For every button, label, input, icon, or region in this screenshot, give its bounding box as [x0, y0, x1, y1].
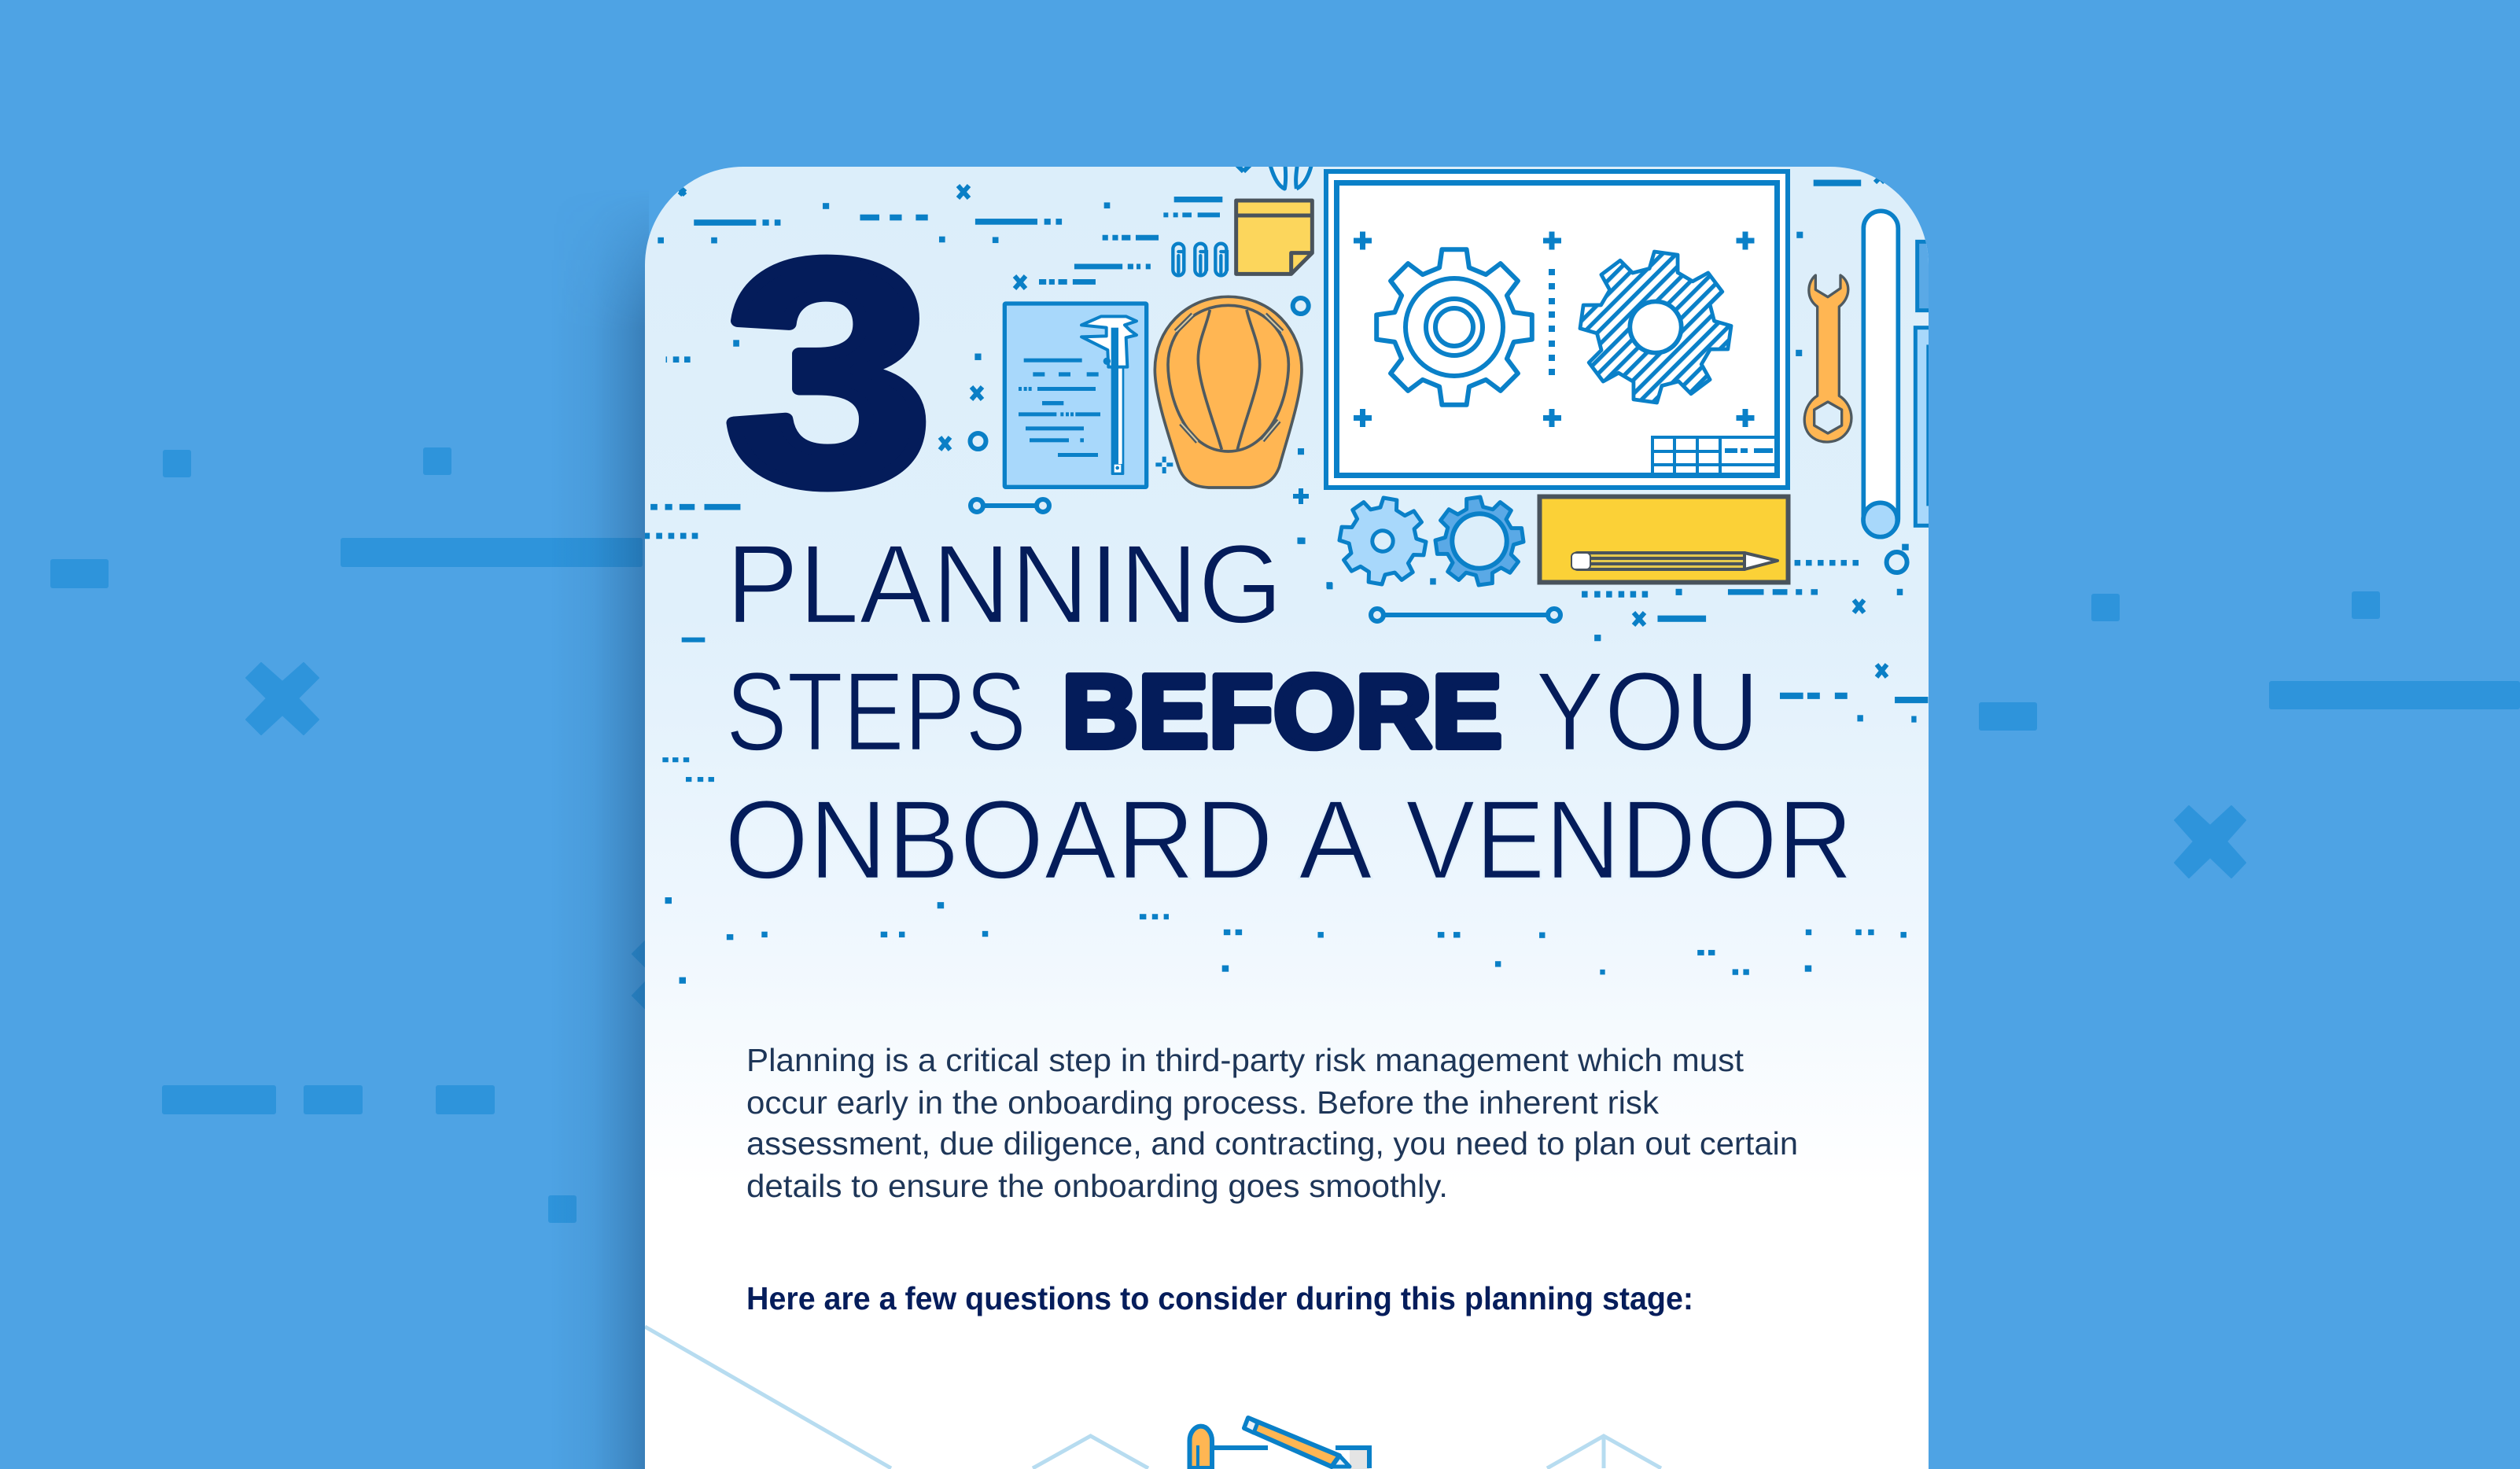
text block: intro [746, 1042, 1798, 1204]
title block table [1652, 437, 1778, 477]
icon: connector right [1371, 609, 1560, 621]
icon: sticky note and paper clips [1163, 165, 1312, 275]
title line 3: vendor: VENDOR [1406, 778, 1853, 903]
icon: document with caliper [1004, 304, 1147, 487]
pencil [1571, 553, 1778, 569]
icon: connector left [971, 499, 1049, 512]
title line 3: a: A [1299, 778, 1373, 903]
icon: mid blue gear [1433, 495, 1526, 587]
icon: blueprint [1326, 171, 1788, 488]
text block: lead-in question: Here are a few questions to consider during this planning stage: [746, 1280, 1693, 1316]
icon: wrench [1804, 275, 1851, 442]
icon: yellow box with pencil [1540, 497, 1789, 582]
title line 2: you: YOU [1535, 650, 1759, 775]
card shadow [588, 212, 649, 1469]
text block: intro: assessment, due diligence, and contracting, you need to plan out certain [746, 1125, 1798, 1162]
number three: 3 [725, 196, 932, 550]
outlined gear [1376, 249, 1532, 405]
title line 2: steps: STEPS [726, 650, 1026, 775]
title line 2: before: BEFORE [1062, 654, 1502, 769]
plus marks [1354, 231, 1754, 427]
icon: light blue gear [1337, 495, 1428, 587]
background pattern: dashes and crosses [50, 447, 2520, 1223]
panel: card [645, 164, 1936, 1469]
icon: small plus marker [1155, 457, 1173, 473]
decorative dashes [645, 202, 1159, 539]
text block: intro: Planning is a critical step in third-party risk management which must [746, 1042, 1744, 1078]
text block: intro: details to ensure the onboarding goes smoothly. [746, 1168, 1448, 1204]
clipped panels at right edge [1915, 241, 1936, 525]
text block: intro: occur early in the onboarding process. Before the inherent risk [746, 1084, 1660, 1121]
title line 1: PLANNING [726, 522, 1283, 647]
hatched gear [1578, 250, 1733, 404]
diagram lines bottom [645, 1327, 1661, 1468]
dotted divider [1549, 269, 1555, 375]
icon: ruler and pencil, cropped [1189, 1418, 1369, 1469]
icon: rolled tube [1863, 211, 1936, 537]
title line 3: onboard: ONBOARD [724, 778, 1273, 903]
icon: hard hat [1155, 296, 1302, 488]
title [730, 545, 1850, 881]
